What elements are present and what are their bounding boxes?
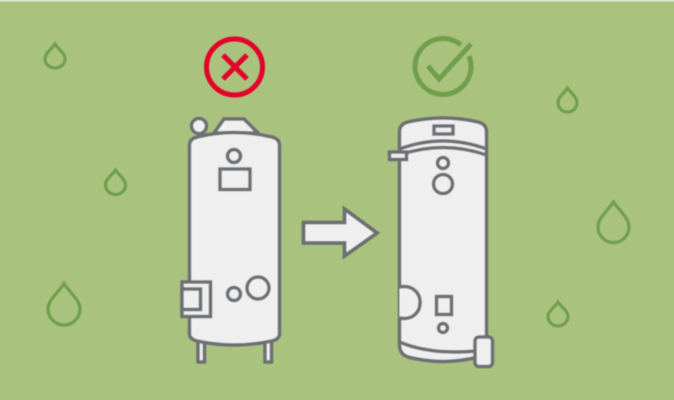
arrow — [304, 209, 377, 256]
small knob — [438, 324, 448, 332]
side tab — [390, 152, 406, 160]
small gauge — [438, 158, 448, 168]
new water heater — [390, 118, 492, 366]
heater flue cap — [214, 119, 258, 133]
top band — [400, 141, 486, 155]
heater label plate — [220, 169, 250, 190]
icon: green check in circle — [415, 38, 471, 94]
heater gauge — [228, 150, 240, 162]
icon: water drop bottom left — [48, 284, 80, 325]
icon: water drop bottom right — [548, 302, 568, 326]
burner box — [182, 282, 210, 316]
large gauge — [434, 174, 452, 194]
bottom band — [400, 342, 476, 352]
artwork — [45, 38, 629, 366]
large dial — [247, 277, 269, 299]
control panel — [436, 296, 452, 314]
icon: water drop middle left — [106, 170, 126, 194]
heater legs — [198, 340, 272, 362]
heater body — [190, 132, 280, 345]
icon: water drops — [45, 44, 629, 326]
heater body — [400, 118, 486, 362]
icon: red cross in circle — [206, 39, 262, 95]
icon: water drop top right — [558, 88, 577, 112]
icon: water drop top left — [45, 44, 65, 68]
small dial — [228, 288, 240, 300]
side bulge — [400, 287, 420, 318]
icon: water drop middle right — [598, 202, 629, 242]
top plate — [434, 126, 453, 134]
old water heater — [182, 118, 280, 362]
corner control box — [475, 337, 492, 366]
pressure valve knob — [192, 118, 206, 134]
